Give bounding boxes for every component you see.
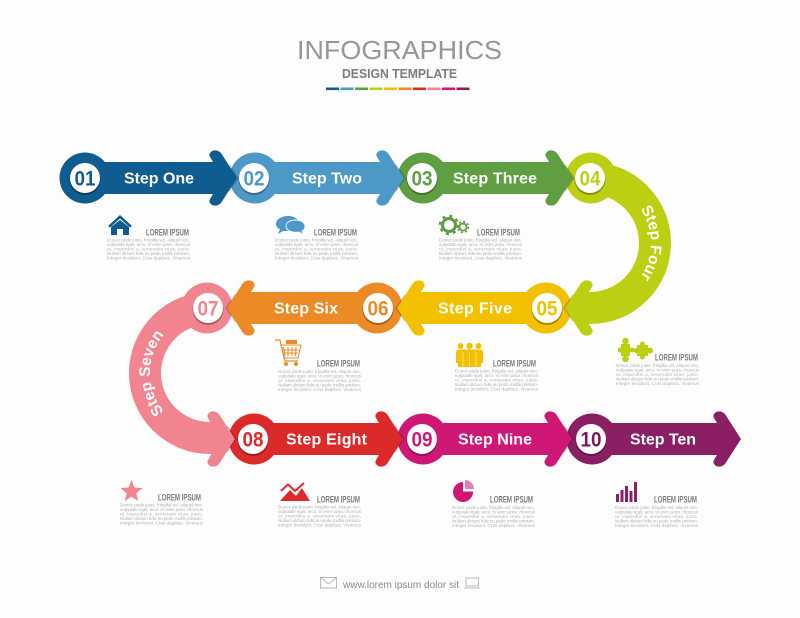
icon: puzzle pieces — [618, 338, 653, 362]
text block: step 6: vulputate eget, arcu. In enim justo, rhoncus — [278, 374, 362, 378]
text block: step 9: Nullam dictum felis eu pede mollis pretium. — [452, 518, 535, 524]
text block: step 4: LOREM IPSUM — [655, 352, 698, 362]
text block: step 10: vulputate eget, arcu. In enim justo, rhoncus — [615, 510, 699, 514]
text block: step 2: Nullam dictum felis eu pede mollis pretium. — [275, 251, 358, 256]
text block: step 8 — [278, 494, 362, 528]
step 9 arrow: 09 — [412, 428, 432, 452]
step 2 arrow: Step Two — [292, 170, 362, 188]
step 4 curved arrow: Step Four — [642, 205, 662, 282]
text block: step 9: Donec pede justo, fringilla vel, aliquet nec, — [452, 505, 535, 510]
text block: step 9: LOREM IPSUM — [490, 494, 533, 504]
text block: step 4: Nullam dictum felis eu pede mollis pretium. — [616, 376, 699, 382]
text block: step 8: Integer tincidunt. Cras dapibus. Vivamus — [278, 522, 362, 528]
step 7 curved arrow — [129, 282, 236, 467]
step 10 arrow: 10 — [580, 428, 602, 452]
icon: gears — [440, 216, 468, 234]
step 8 arrow: 08 — [242, 428, 264, 452]
step 1 arrow: 01 — [74, 168, 96, 190]
text block: step 3: Integer tincidunt. Cras dapibus. Vivamus — [439, 256, 523, 260]
text block: step 2: LOREM IPSUM — [314, 228, 357, 238]
title — [297, 35, 502, 81]
text block: step 8: Nullam dictum felis eu pede mollis pretium. — [278, 518, 361, 523]
text block: step 1: ut, imperdiet a, venenatis vitae, justo. — [107, 246, 190, 252]
text block: step 3: vulputate eget, arcu. In enim justo, rhoncus — [439, 242, 523, 247]
text block: step 10: ut, imperdiet a, venenatis vitae, justo. — [615, 514, 698, 519]
text block: step 9: Integer tincidunt. Cras dapibus. Vivamus — [452, 523, 536, 528]
text block: step 10: Donec pede justo, fringilla vel, aliquet nec, — [615, 505, 698, 510]
text block: step 7: Integer tincidunt. Cras dapibus. Vivamus — [120, 520, 204, 526]
step 2 arrow: 02 — [244, 168, 264, 190]
text block: step 5: ut, imperdiet a, venenatis vitae, justo. — [455, 378, 538, 382]
step 7 curved arrow: Step Seven — [139, 331, 164, 416]
text block: step 6 — [278, 358, 362, 392]
text block: step 5: LOREM IPSUM — [493, 358, 536, 368]
text block: step 4: ut, imperdiet a, venenatis vitae, justo. — [616, 372, 699, 377]
text block: step 3: Donec pede justo, fringilla vel, aliquet nec, — [439, 238, 522, 242]
step 5 arrow — [396, 280, 572, 336]
text block: step 4: vulputate eget, arcu. In enim justo, rhoncus — [616, 368, 700, 372]
step 8 arrow: Step Eight — [286, 432, 368, 448]
icon: shopping cart — [275, 340, 301, 366]
title: INFOGRAPHICS — [297, 35, 502, 65]
icon: star — [120, 480, 142, 501]
text block: step 3 — [439, 228, 523, 260]
icon: house — [108, 215, 132, 235]
step 6 arrow: 06 — [368, 298, 388, 320]
text block: step 4: Integer tincidunt. Cras dapibus. Vivamus — [616, 381, 700, 386]
text block: step 2: ut, imperdiet a, venenatis vitae, justo. — [275, 246, 358, 252]
step 1 arrow: Step One — [124, 170, 194, 188]
text block: step 2: Donec pede justo, fringilla vel, aliquet nec, — [275, 238, 358, 242]
icon: laptop — [464, 578, 480, 588]
text block: step 3: ut, imperdiet a, venenatis vitae, justo. — [439, 246, 522, 252]
text block: step 8: vulputate eget, arcu. In enim justo, rhoncus — [278, 509, 362, 514]
step 7 curved arrow: 07 — [198, 298, 218, 320]
text block: step 8: ut, imperdiet a, venenatis vitae, justo. — [278, 514, 361, 518]
step 4 curved arrow — [564, 152, 671, 336]
step 3 arrow — [398, 150, 574, 206]
step 2 arrow — [230, 150, 405, 206]
text block: step 6: Donec pede justo, fringilla vel, aliquet nec, — [278, 369, 361, 374]
text block: step 1: Integer tincidunt. Cras dapibus. Vivamus — [107, 256, 191, 260]
step 4 curved arrow: 04 — [580, 168, 601, 190]
text block: step 5: Integer tincidunt. Cras dapibus. Vivamus — [455, 386, 539, 392]
step 6 arrow: Step Six — [274, 300, 338, 318]
step 6 arrow — [226, 280, 402, 336]
step 10 arrow — [566, 411, 741, 467]
text block: step 7: ut, imperdiet a, venenatis vitae, justo. — [120, 512, 203, 516]
text block: step 1 — [107, 228, 191, 260]
text block: step 10: Integer tincidunt. Cras dapibus. Vivamus — [615, 523, 699, 528]
text block: step 2: vulputate eget, arcu. In enim justo, rhoncus — [275, 242, 359, 247]
footer url: www.lorem ipsum dolor sit — [342, 580, 459, 591]
text block: step 5 — [455, 358, 539, 392]
step 1 arrow — [60, 150, 238, 206]
title: DESIGN TEMPLATE — [342, 67, 457, 81]
text block: step 1: Nullam dictum felis eu pede mollis pretium. — [107, 251, 190, 256]
text block: step 9: ut, imperdiet a, venenatis vitae, justo. — [452, 514, 535, 519]
text block: step 2 — [275, 228, 359, 260]
step 5 arrow: 05 — [536, 298, 558, 320]
text block: step 1: vulputate eget, arcu. In enim justo, rhoncus — [107, 242, 191, 247]
text block: step 6: LOREM IPSUM — [317, 358, 360, 368]
text block: step 3: Nullam dictum felis eu pede mollis pretium. — [439, 251, 522, 256]
text block: step 5: vulputate eget, arcu. In enim justo, rhoncus — [455, 373, 539, 378]
text block: step 2: Integer tincidunt. Cras dapibus. Vivamus — [275, 256, 359, 260]
icon: envelope — [320, 578, 336, 588]
icon: people group — [456, 343, 483, 367]
step 8 arrow — [228, 411, 404, 467]
icon: pie chart — [453, 480, 474, 502]
text block: step 9 — [452, 494, 536, 528]
step 9 arrow: Step Nine — [458, 432, 532, 448]
step 10 arrow: Step Ten — [630, 432, 696, 448]
text block: step 10: Nullam dictum felis eu pede mollis pretium. — [615, 518, 698, 524]
text block: step 8: Donec pede justo, fringilla vel, aliquet nec, — [278, 504, 361, 510]
text block: step 1: Donec pede justo, fringilla vel, aliquet nec, — [107, 238, 190, 242]
icon: bar chart — [616, 482, 637, 502]
colour key bar — [326, 88, 470, 90]
text block: step 4 — [616, 352, 700, 386]
text block: step 10 — [615, 494, 699, 528]
text block: step 5: Donec pede justo, fringilla vel, aliquet nec, — [455, 368, 538, 374]
icon: line over mountains — [280, 483, 310, 501]
text block: step 5: Nullam dictum felis eu pede mollis pretium. — [455, 382, 538, 387]
text block: step 6: Integer tincidunt. Cras dapibus. Vivamus — [278, 387, 362, 392]
text block: step 7: LOREM IPSUM — [158, 492, 201, 502]
text block: step 4: Donec pede justo, fringilla vel, aliquet nec, — [616, 363, 699, 368]
text block: step 7: Donec pede justo, fringilla vel, aliquet nec, — [120, 502, 203, 508]
icon: chat bubbles — [276, 216, 305, 235]
text block: step 7: vulputate eget, arcu. In enim justo, rhoncus — [120, 507, 204, 512]
text block: step 1: LOREM IPSUM — [146, 228, 189, 238]
text block: step 6: Nullam dictum felis eu pede mollis pretium. — [278, 382, 361, 388]
text block: step 6: ut, imperdiet a, venenatis vitae, justo. — [278, 378, 361, 383]
text block: step 8: LOREM IPSUM — [317, 494, 360, 504]
text block: step 9: vulputate eget, arcu. In enim justo, rhoncus — [452, 510, 536, 514]
text block: step 10: LOREM IPSUM — [654, 494, 697, 504]
step 3 arrow: 03 — [412, 168, 432, 190]
text block: step 7 — [120, 492, 204, 526]
text block: step 7: Nullam dictum felis eu pede mollis pretium. — [120, 516, 203, 521]
step 3 arrow: Step Three — [453, 170, 537, 188]
text block: step 3: LOREM IPSUM — [477, 228, 520, 238]
step 5 arrow: Step Five — [438, 300, 512, 318]
step 9 arrow — [398, 411, 573, 467]
